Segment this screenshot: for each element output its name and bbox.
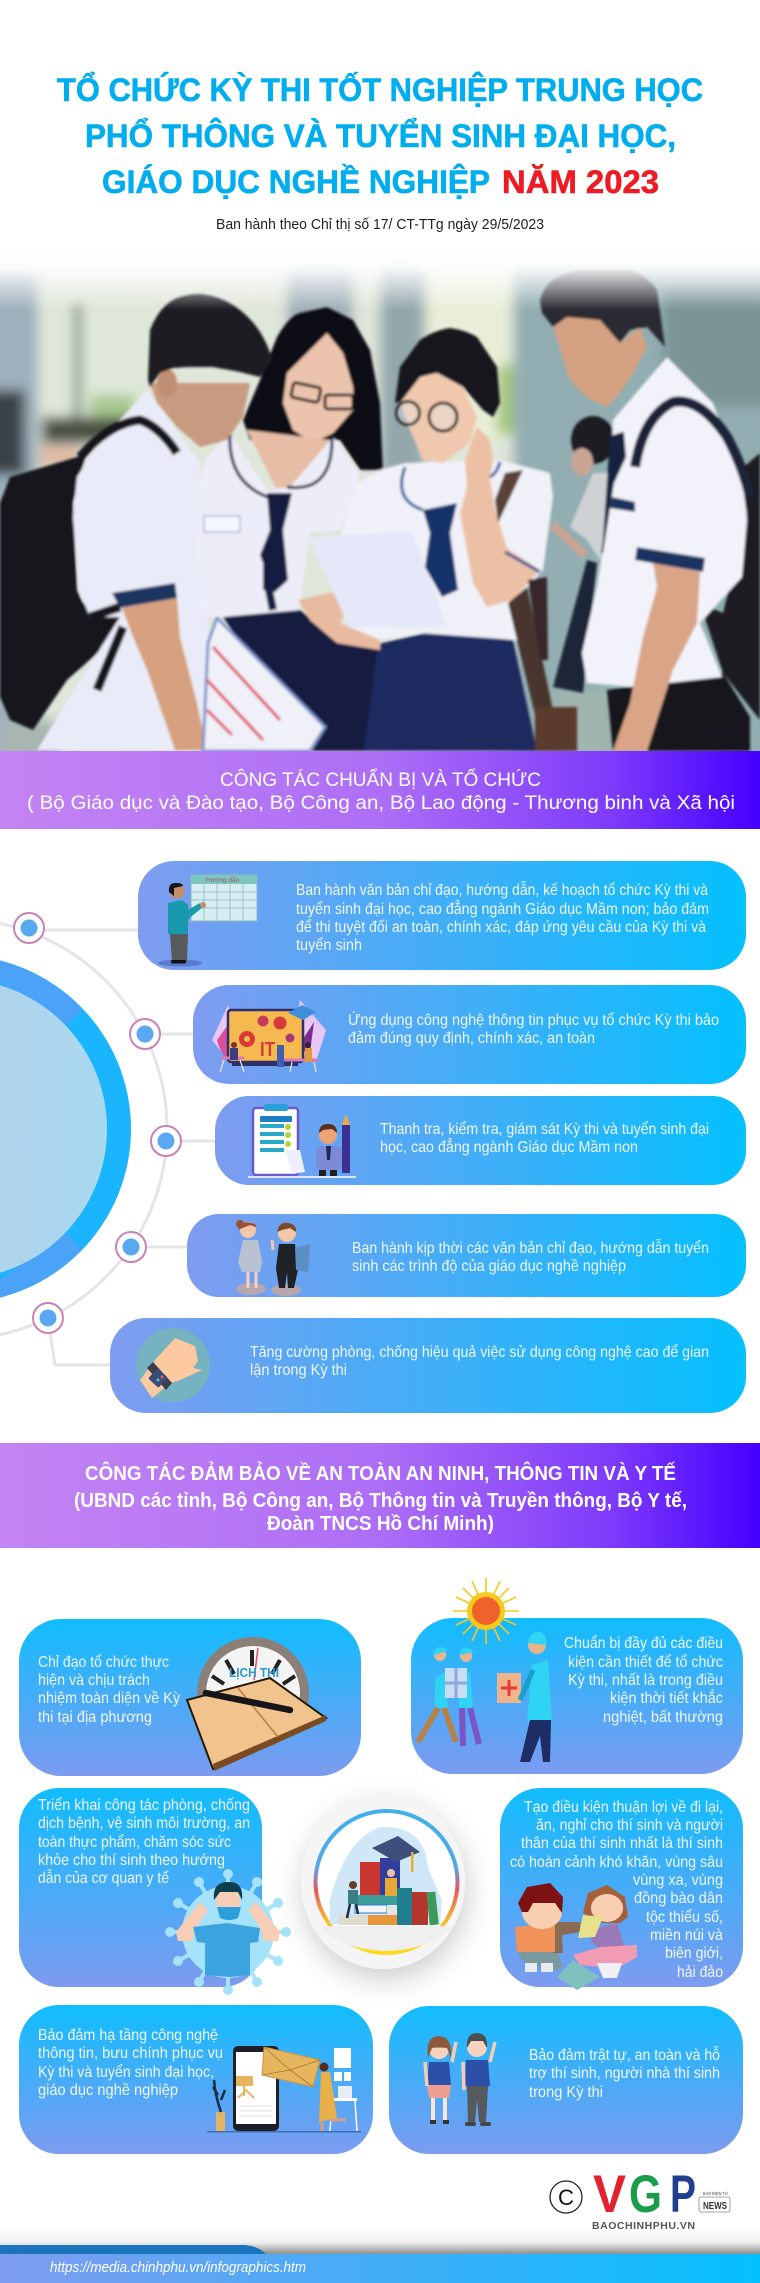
boy right xyxy=(700,453,760,720)
icon: virus and man with mask xyxy=(165,1869,291,1995)
icon: two student volunteers xyxy=(425,2033,495,2126)
text block xyxy=(352,1238,709,1275)
text block xyxy=(529,2045,720,2101)
text block: Ứng dụng công nghệ thông tin phục vụ tổ chức Kỳ thi bảo xyxy=(348,1010,719,1029)
text block xyxy=(296,880,709,954)
panel: postal and IT infrastructure xyxy=(19,2005,373,2154)
text block: ăn, nghỉ cho thí sinh và người xyxy=(536,1817,723,1834)
text block: Triển khai công tác phòng, chống xyxy=(38,1796,250,1814)
title xyxy=(57,72,703,200)
girl with glasses, paper xyxy=(364,632,537,751)
text block xyxy=(38,1796,250,1887)
logo: VGP news: V xyxy=(593,2165,626,2224)
text block: học, cao đẳng ngành Giáo dục Mầm non xyxy=(380,1137,638,1156)
text block: để thi tuyệt đối an toàn, chính xác, đáp ứng yêu cầu của Kỳ thi và xyxy=(296,918,706,936)
text block: sinh các trình độ của giáo dục nghề nghiệp xyxy=(352,1258,626,1275)
hub diagram: big circle with connectors xyxy=(0,913,217,1365)
boy left: head, drawn over the girl's hair xyxy=(150,383,250,447)
icon: phone, envelope and woman xyxy=(207,2046,361,2132)
text block: Kỳ thi, nhất là trong điều xyxy=(568,1672,723,1689)
icon: medics carrying boxes xyxy=(418,1632,552,1762)
panel: favourable conditions for candidates xyxy=(500,1788,743,1990)
panel: local responsibility xyxy=(19,1619,361,1776)
text block: Tăng cường phòng, chống hiệu quả việc sử dụng công nghệ cao để gian xyxy=(250,1343,709,1361)
icon: hand with smartwatch xyxy=(136,1328,210,1402)
text block xyxy=(38,2027,223,2099)
icon: IT monitor with gears xyxy=(212,1000,326,1072)
connector node 4 xyxy=(116,1232,146,1262)
text block: Chỉ đạo tổ chức thực xyxy=(38,1653,169,1671)
title: TỔ CHỨC KỲ THI TỐT NGHIỆP TRUNG HỌC xyxy=(57,72,703,108)
icon: sun xyxy=(453,1578,519,1644)
text block: có hoàn cảnh khó khăn, vùng sâu xyxy=(510,1854,723,1871)
logo: VGP news: NEWS xyxy=(703,2201,727,2212)
text block: tuyển sinh đại học, cao đẳng ngành Giáo dục Mầm non; bảo đảm xyxy=(296,899,709,918)
footer band with source URL xyxy=(0,2228,760,2283)
logo: VGP news xyxy=(550,2165,730,2232)
text block: dẫn của cơ quan y tế xyxy=(38,1868,169,1887)
section band: security, information and health: (UBND các tỉnh, Bộ Công an, Bộ Thông tin và Truyền thông, Bộ Y tế, xyxy=(74,1490,687,1512)
girl with long hair xyxy=(243,307,383,470)
text block xyxy=(380,1120,709,1156)
logo: VGP news: G xyxy=(629,2165,662,2224)
panel: guidance documents xyxy=(138,861,746,970)
panel: epidemic prevention xyxy=(19,1788,291,1995)
section band: preparation and organisation xyxy=(0,751,760,829)
text block: nhiệm toàn diện về Kỳ xyxy=(38,1690,180,1707)
text block: thi tại địa phương xyxy=(38,1709,152,1726)
icon: two children reading xyxy=(515,1883,637,1990)
icon: IT monitor with gears: IT xyxy=(260,1039,275,1061)
section band: security, information and health: CÔNG TÁC ĐẢM BẢO VỀ AN TOÀN AN NINH, THÔNG TIN VÀ Y TẾ xyxy=(85,1461,676,1485)
background child xyxy=(571,416,615,464)
text block: dịch bệnh, vệ sinh môi trường, an xyxy=(38,1815,250,1832)
text block: Ban hành văn bản chỉ đạo, hướng dẫn, kế hoạch tổ chức Kỳ thi và xyxy=(296,880,708,899)
text block xyxy=(510,1799,723,1981)
text block: nghiệt, bất thường xyxy=(603,1709,723,1726)
text block: tuyển sinh xyxy=(296,936,362,954)
text block: đảm đúng quy định, chính xác, an toàn xyxy=(348,1030,595,1047)
icon: clock and open book: LỊCH THI xyxy=(229,1665,279,1680)
text block: Thanh tra, kiểm tra, giám sát Kỳ thi và tuyển sinh đại xyxy=(380,1120,709,1138)
text block: trong Kỳ thi xyxy=(529,2084,603,2101)
text block: lận trong Kỳ thi xyxy=(250,1362,347,1379)
photo: four students reading a paper xyxy=(0,240,760,772)
panel: anti-cheating technology xyxy=(110,1318,746,1413)
icon: clock and open book xyxy=(187,1637,326,1771)
panel: order and support xyxy=(389,2006,743,2154)
text block: giáo dục nghề nghiệp xyxy=(38,2082,178,2099)
text block: Tạo điều kiện thuận lợi về đi lại, xyxy=(524,1799,723,1816)
boy left: backpack and shirt xyxy=(0,450,127,730)
text block: vùng xa, vùng xyxy=(633,1872,723,1889)
text block: kiện thời tiết khắc xyxy=(610,1688,723,1707)
text block xyxy=(250,1343,709,1379)
section band: security, information and health xyxy=(0,1443,760,1548)
text block: hải đảo xyxy=(677,1964,723,1981)
panel: extreme weather conditions xyxy=(411,1578,743,1774)
connector node 1 xyxy=(14,913,44,943)
title: PHỔ THÔNG VÀ TUYỂN SINH ĐẠI HỌC, xyxy=(85,118,676,154)
text block: Bảo đảm trật tự, an toàn và hỗ xyxy=(529,2045,720,2064)
logo: VGP news: P xyxy=(670,2165,696,2224)
icon: man presenting schedule board: Hướng dẫn xyxy=(206,875,240,884)
text block: đồng bào dân xyxy=(634,1890,723,1907)
title: NĂM 2023 xyxy=(502,164,659,200)
connector node 3 xyxy=(151,1126,181,1156)
connector node 2 xyxy=(130,1019,160,1049)
centre badge: books and graduation cap xyxy=(301,1795,465,1969)
subtitle: Ban hành theo Chỉ thị số 17/ CT-TTg ngày 29/5/2023 xyxy=(216,216,544,233)
text block: trợ thí sinh, người nhà thí sinh xyxy=(529,2065,720,2082)
text block: kiện cần thiết để tổ chức xyxy=(568,1653,723,1671)
text block: hiện và chịu trách xyxy=(38,1672,150,1689)
text block: toàn thực phẩm, chăm sóc sức xyxy=(38,1833,231,1851)
text block: tộc thiểu số, xyxy=(646,1908,723,1926)
logo: VGP news: C xyxy=(558,2185,574,2210)
text block: Chuẩn bị đầy đủ các điều xyxy=(564,1634,723,1652)
text block xyxy=(348,1010,719,1047)
section band: preparation and organisation: CÔNG TÁC CHUẨN BỊ VÀ TỔ CHỨC xyxy=(220,767,541,791)
panel: inspection xyxy=(215,1096,746,1185)
text block: Bảo đảm hạ tầng công nghệ xyxy=(38,2027,218,2044)
icon: two officials talking xyxy=(236,1220,310,1296)
footer band with source URL: https://media.chinhphu.vn/infographics.htm xyxy=(50,2259,306,2276)
connector node 5 xyxy=(33,1303,63,1333)
text block: thông tin, bưu chính phục vụ xyxy=(38,2045,223,2062)
text block: khỏe cho thí sinh theo hướng xyxy=(38,1852,225,1869)
section band: security, information and health: Đoàn TNCS Hồ Chí Minh) xyxy=(267,1513,494,1535)
text block: biên giới, xyxy=(665,1945,723,1962)
section band: preparation and organisation: ( Bộ Giáo dục và Đào tạo, Bộ Công an, Bộ Lao động - Thương binh và Xã hội xyxy=(27,792,735,814)
text block: thân của thí sinh nhất là thí sinh xyxy=(521,1835,723,1852)
text block: Ban hành kịp thời các văn bản chỉ đạo, hướng dẫn tuyển xyxy=(352,1238,709,1257)
panel: vocational admissions xyxy=(187,1214,746,1297)
icon: clipboard and man with pencil xyxy=(248,1104,356,1178)
icon: man presenting schedule board xyxy=(158,875,257,966)
logo: VGP news: BÁO ĐIỆN TỬ xyxy=(703,2189,728,2196)
text block: Kỳ thi và tuyển sinh đại học, xyxy=(38,2063,214,2081)
text block xyxy=(564,1634,723,1726)
text block: miền núi và xyxy=(650,1927,723,1944)
title: GIÁO DỤC NGHỀ NGHIỆP xyxy=(102,164,490,200)
panel: information technology xyxy=(193,985,746,1084)
text block xyxy=(38,1653,180,1726)
logo: VGP news: BAOCHINHPHU.VN xyxy=(592,2220,695,2232)
